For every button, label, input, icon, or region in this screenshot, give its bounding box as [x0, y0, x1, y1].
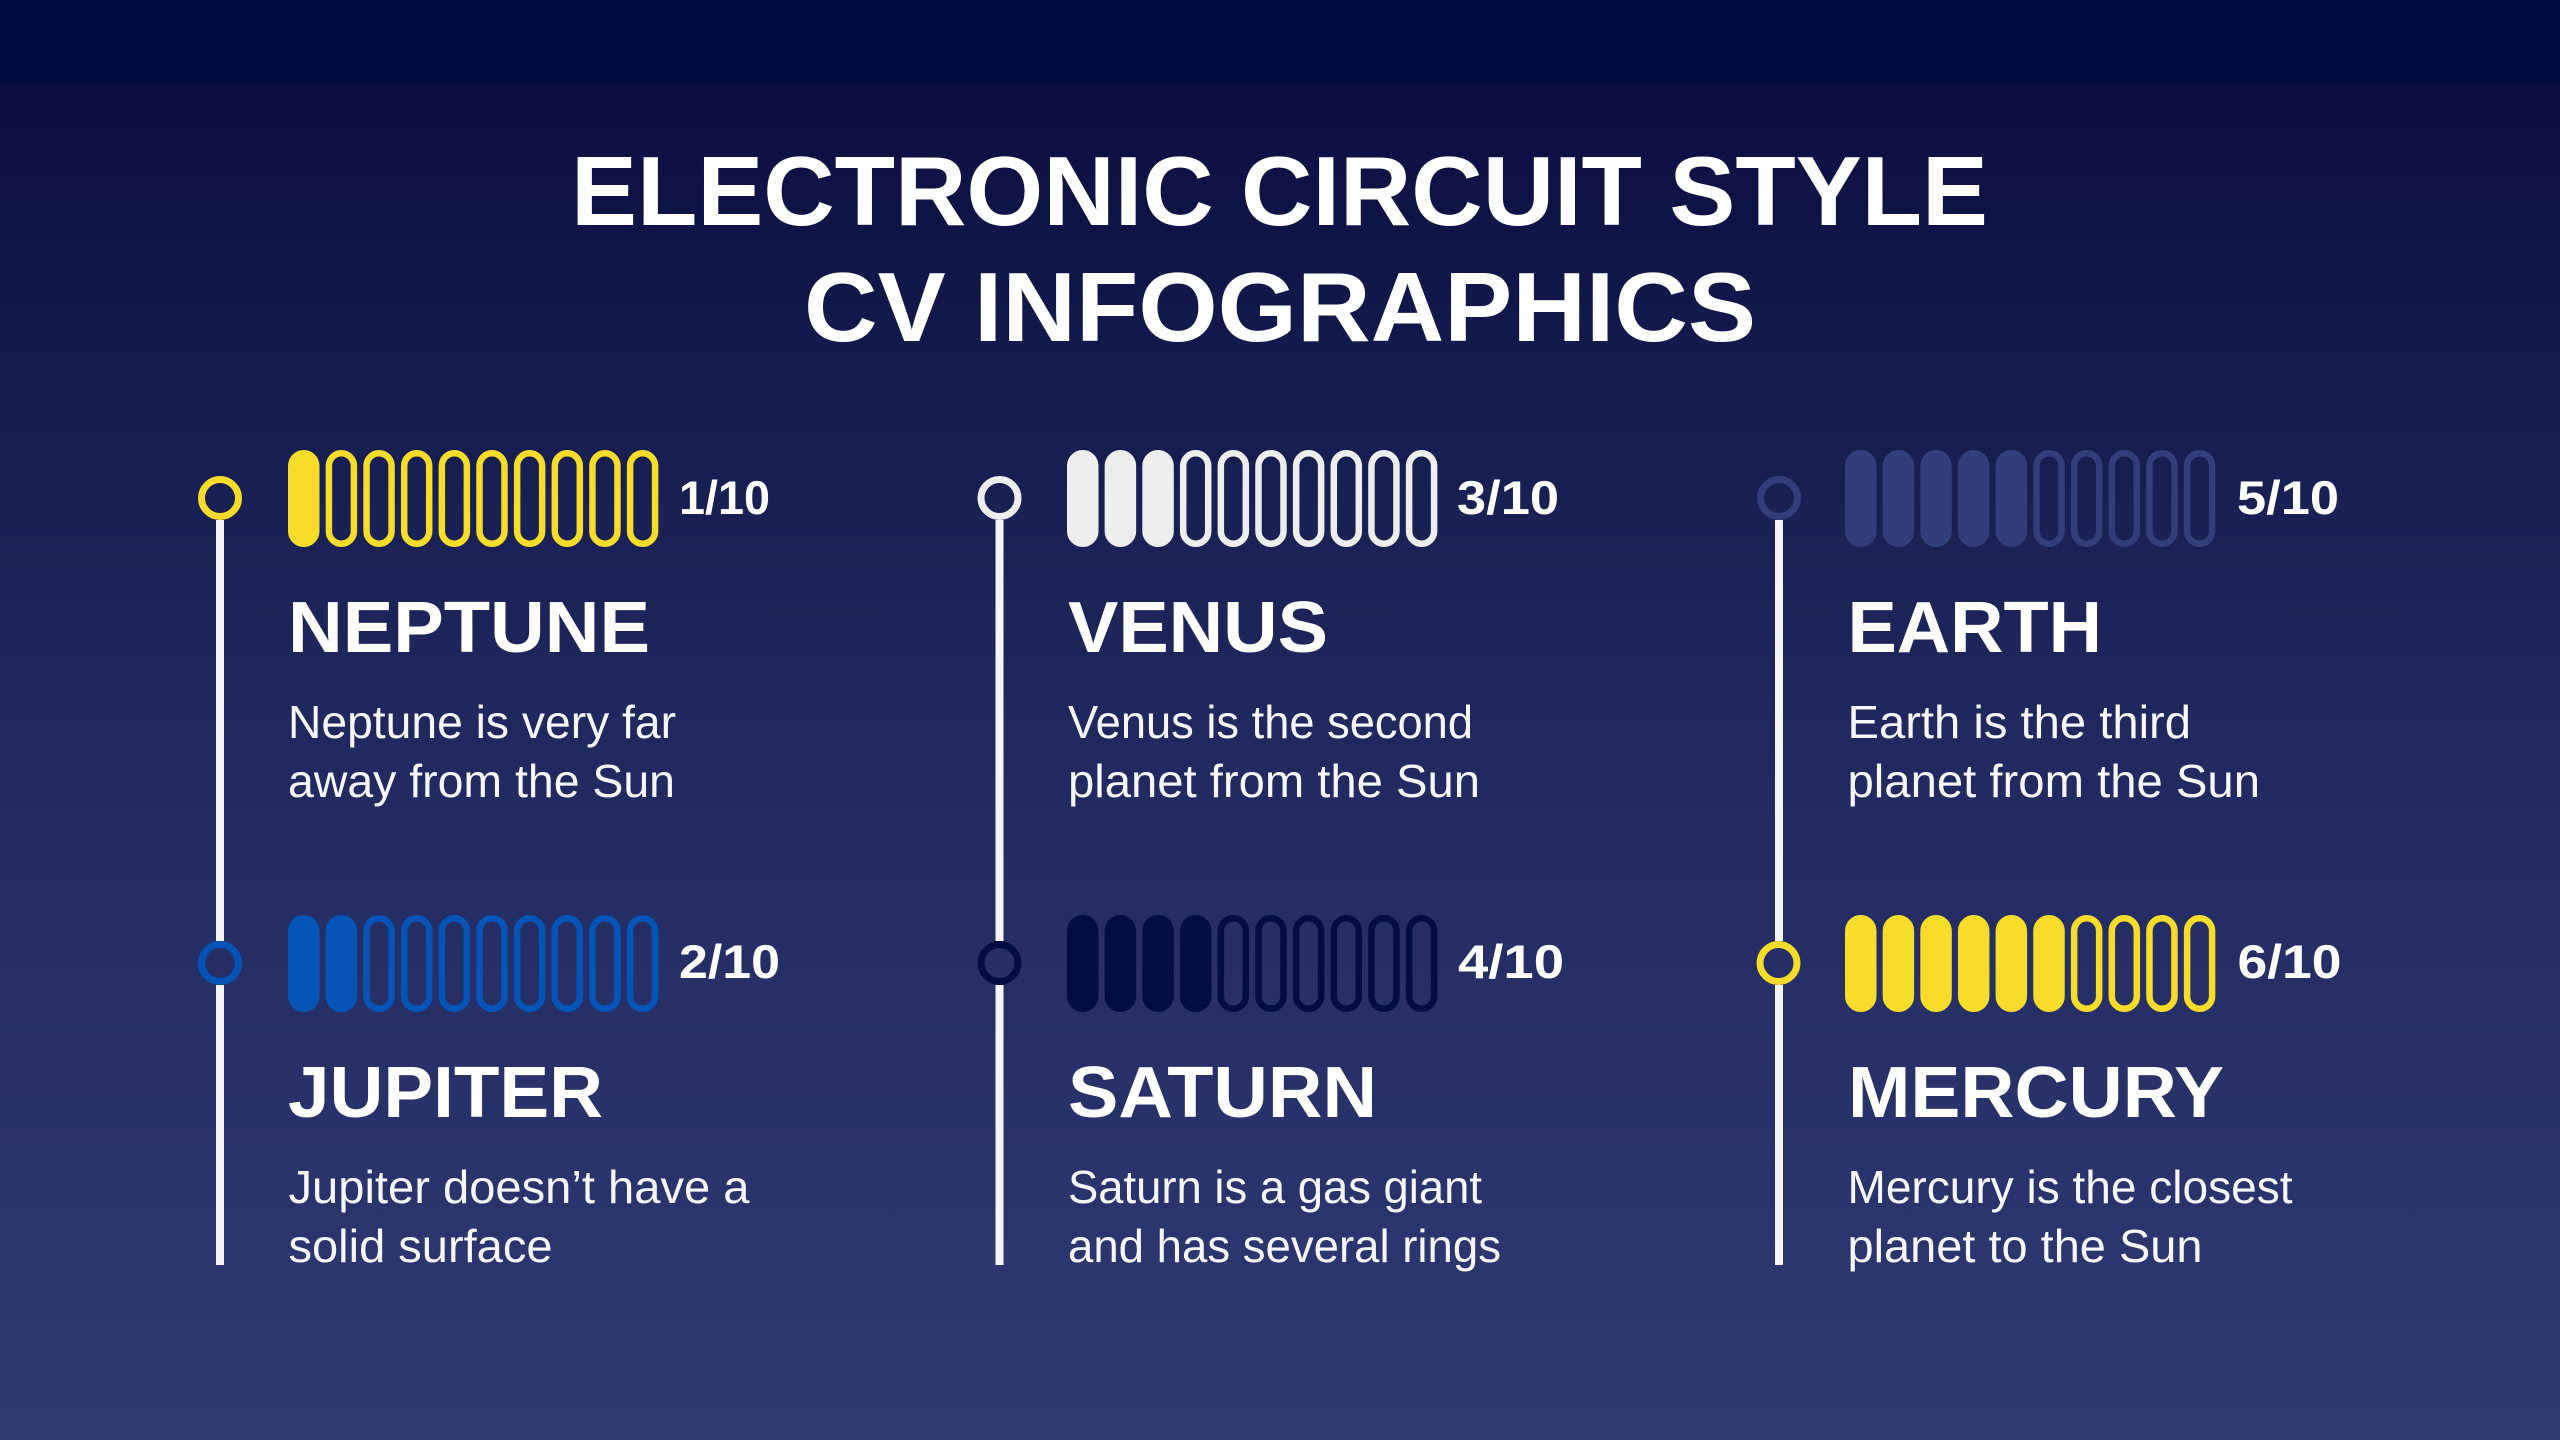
node: Earth — [1760, 480, 1798, 516]
panel: Jupiter — [202, 918, 780, 1272]
gauge: Saturn 4 of 10 — [1070, 918, 1434, 1009]
title — [571, 136, 1988, 362]
name: Earth: EARTH — [1848, 588, 2102, 668]
node: Jupiter — [202, 944, 238, 982]
name: Saturn: SATURN — [1068, 1053, 1377, 1133]
node: Saturn — [981, 944, 1018, 982]
description: Venus — [1068, 696, 1480, 807]
panel: Neptune — [202, 453, 770, 807]
description: Saturn: Saturn is a gas giant — [1068, 1161, 1482, 1213]
gauge: Venus 3 of 10 — [1070, 453, 1434, 544]
score: Neptune: 1/10 — [679, 471, 770, 524]
timeline: column 2 — [996, 520, 1004, 1265]
description: Jupiter — [288, 1161, 750, 1272]
description: Mercury: Mercury is the closest — [1848, 1161, 2293, 1213]
node: Neptune — [202, 480, 238, 516]
description: Earth — [1848, 696, 2260, 807]
title: ELECTRONIC CIRCUIT STYLE — [571, 136, 1988, 246]
gauge: Mercury 6 of 10 — [1848, 918, 2212, 1009]
panel: Saturn — [981, 918, 1564, 1272]
name: Venus: VENUS — [1068, 588, 1328, 668]
description: Venus: planet from the Sun — [1068, 755, 1480, 807]
score: Venus: 3/10 — [1457, 471, 1559, 524]
node: Venus — [981, 480, 1018, 516]
description: Earth: Earth is the third — [1848, 696, 2191, 748]
name: Jupiter: JUPITER — [288, 1053, 603, 1133]
score: Jupiter: 2/10 — [679, 935, 780, 988]
description: Neptune — [288, 696, 676, 807]
description: Mercury — [1848, 1161, 2293, 1272]
gauge: Neptune 1 of 10 — [291, 453, 655, 544]
description: Jupiter: solid surface — [288, 1220, 552, 1272]
description: Venus: Venus is the second — [1068, 696, 1473, 748]
description: Earth: planet from the Sun — [1848, 755, 2260, 807]
description: Neptune: away from the Sun — [288, 755, 675, 807]
gauge: Earth 5 of 10 — [1848, 453, 2212, 544]
score: Mercury: 6/10 — [2238, 935, 2342, 988]
panel: Venus — [981, 453, 1559, 807]
description: Neptune: Neptune is very far — [288, 696, 676, 748]
node: Mercury — [1760, 944, 1797, 982]
timeline: column 1 — [216, 520, 224, 1265]
score: Earth: 5/10 — [2237, 471, 2339, 524]
description: Jupiter: Jupiter doesn’t have a — [288, 1161, 750, 1213]
score: Saturn: 4/10 — [1458, 935, 1564, 988]
panel: Mercury — [1760, 918, 2342, 1272]
description: Saturn — [1068, 1161, 1501, 1272]
description: Mercury: planet to the Sun — [1848, 1220, 2202, 1272]
timeline: column 3 — [1775, 520, 1783, 1265]
panel: Earth — [1760, 453, 2339, 807]
description: Saturn: and has several rings — [1068, 1220, 1501, 1272]
title: CV INFOGRAPHICS — [804, 252, 1756, 362]
name: Neptune: NEPTUNE — [288, 588, 650, 668]
gauge: Jupiter 2 of 10 — [291, 918, 655, 1009]
name: Mercury: MERCURY — [1848, 1053, 2224, 1133]
